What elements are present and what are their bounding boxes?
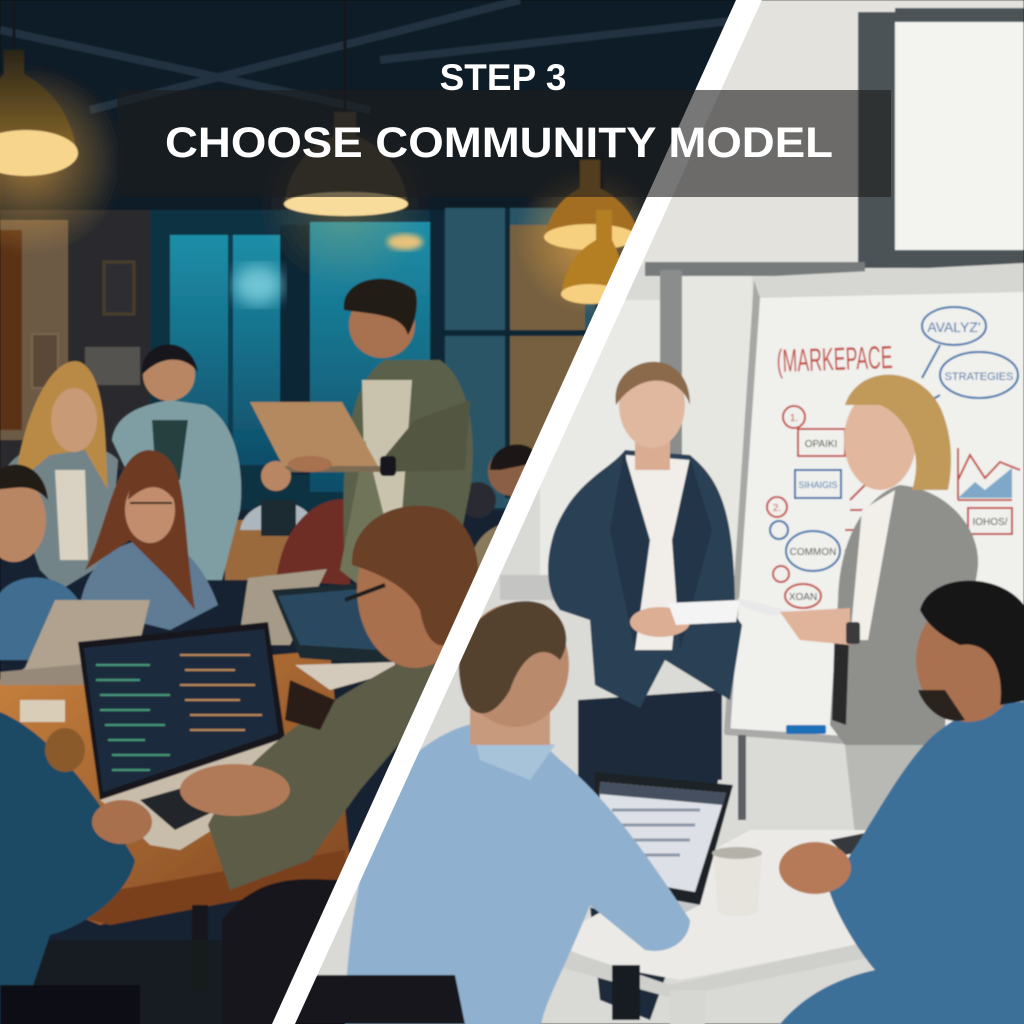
panel: business strategy scene [295, 0, 1024, 1024]
board: strategies bubble [940, 352, 1018, 398]
left wall with warm glow [0, 220, 68, 440]
board: analyze bubble: AVALYZ' [927, 319, 981, 335]
board: note boxes: COMMON [790, 547, 836, 558]
icon: small laptops [0, 569, 397, 690]
icon: laptop [589, 772, 734, 913]
board: marketplace heading: (MARKEPACE [776, 339, 893, 379]
table [571, 829, 866, 980]
board: note boxes [767, 406, 1012, 608]
board: note boxes: OPAIKI [805, 439, 837, 450]
person: standing man with laptop [250, 279, 473, 590]
board: strategies bubble: STRATEGIES [945, 371, 1013, 383]
ceiling beams [0, 0, 740, 110]
lamp glows [0, 66, 117, 247]
laptop with code [78, 622, 300, 850]
person: man in denim left [0, 465, 78, 660]
step label: STEP 3 [440, 57, 566, 98]
board: note boxes: 1. [790, 413, 798, 424]
icon: pendant lamps [0, 0, 638, 304]
person: man in light blue shirt [275, 601, 690, 1024]
person: blonde woman in grey blazer [780, 374, 979, 830]
person: foreground left in denim [0, 710, 152, 1024]
papers on table [830, 832, 865, 856]
board: note boxes: SIHAIGIS [798, 480, 838, 490]
table [0, 650, 350, 925]
person: blonde woman [5, 361, 118, 590]
board: note boxes: IOHOS/ [972, 517, 1008, 528]
title band [117, 90, 891, 197]
person: woman in navy suit [547, 360, 743, 1020]
desk clutter [45, 728, 85, 772]
board: mini chart [958, 448, 1020, 500]
window frames [500, 8, 1024, 600]
icon: coffee cup [712, 847, 762, 916]
board: note boxes: 2. [773, 503, 781, 514]
person: man in denim shirt [779, 581, 1024, 1024]
background people [225, 444, 540, 590]
board: note boxes: XOAN [789, 592, 817, 603]
diagonal divider [272, 0, 762, 1024]
whiteboard with notes [724, 263, 1024, 820]
person: woman with cardigan [112, 344, 241, 580]
person: woman with glasses [80, 450, 218, 630]
windows [170, 208, 595, 508]
panel: developer community scene [0, 0, 736, 1024]
title: CHOOSE COMMUNITY MODEL [165, 119, 833, 167]
person: man with glasses in foreground [178, 505, 478, 964]
board: analyze bubble [922, 307, 986, 345]
